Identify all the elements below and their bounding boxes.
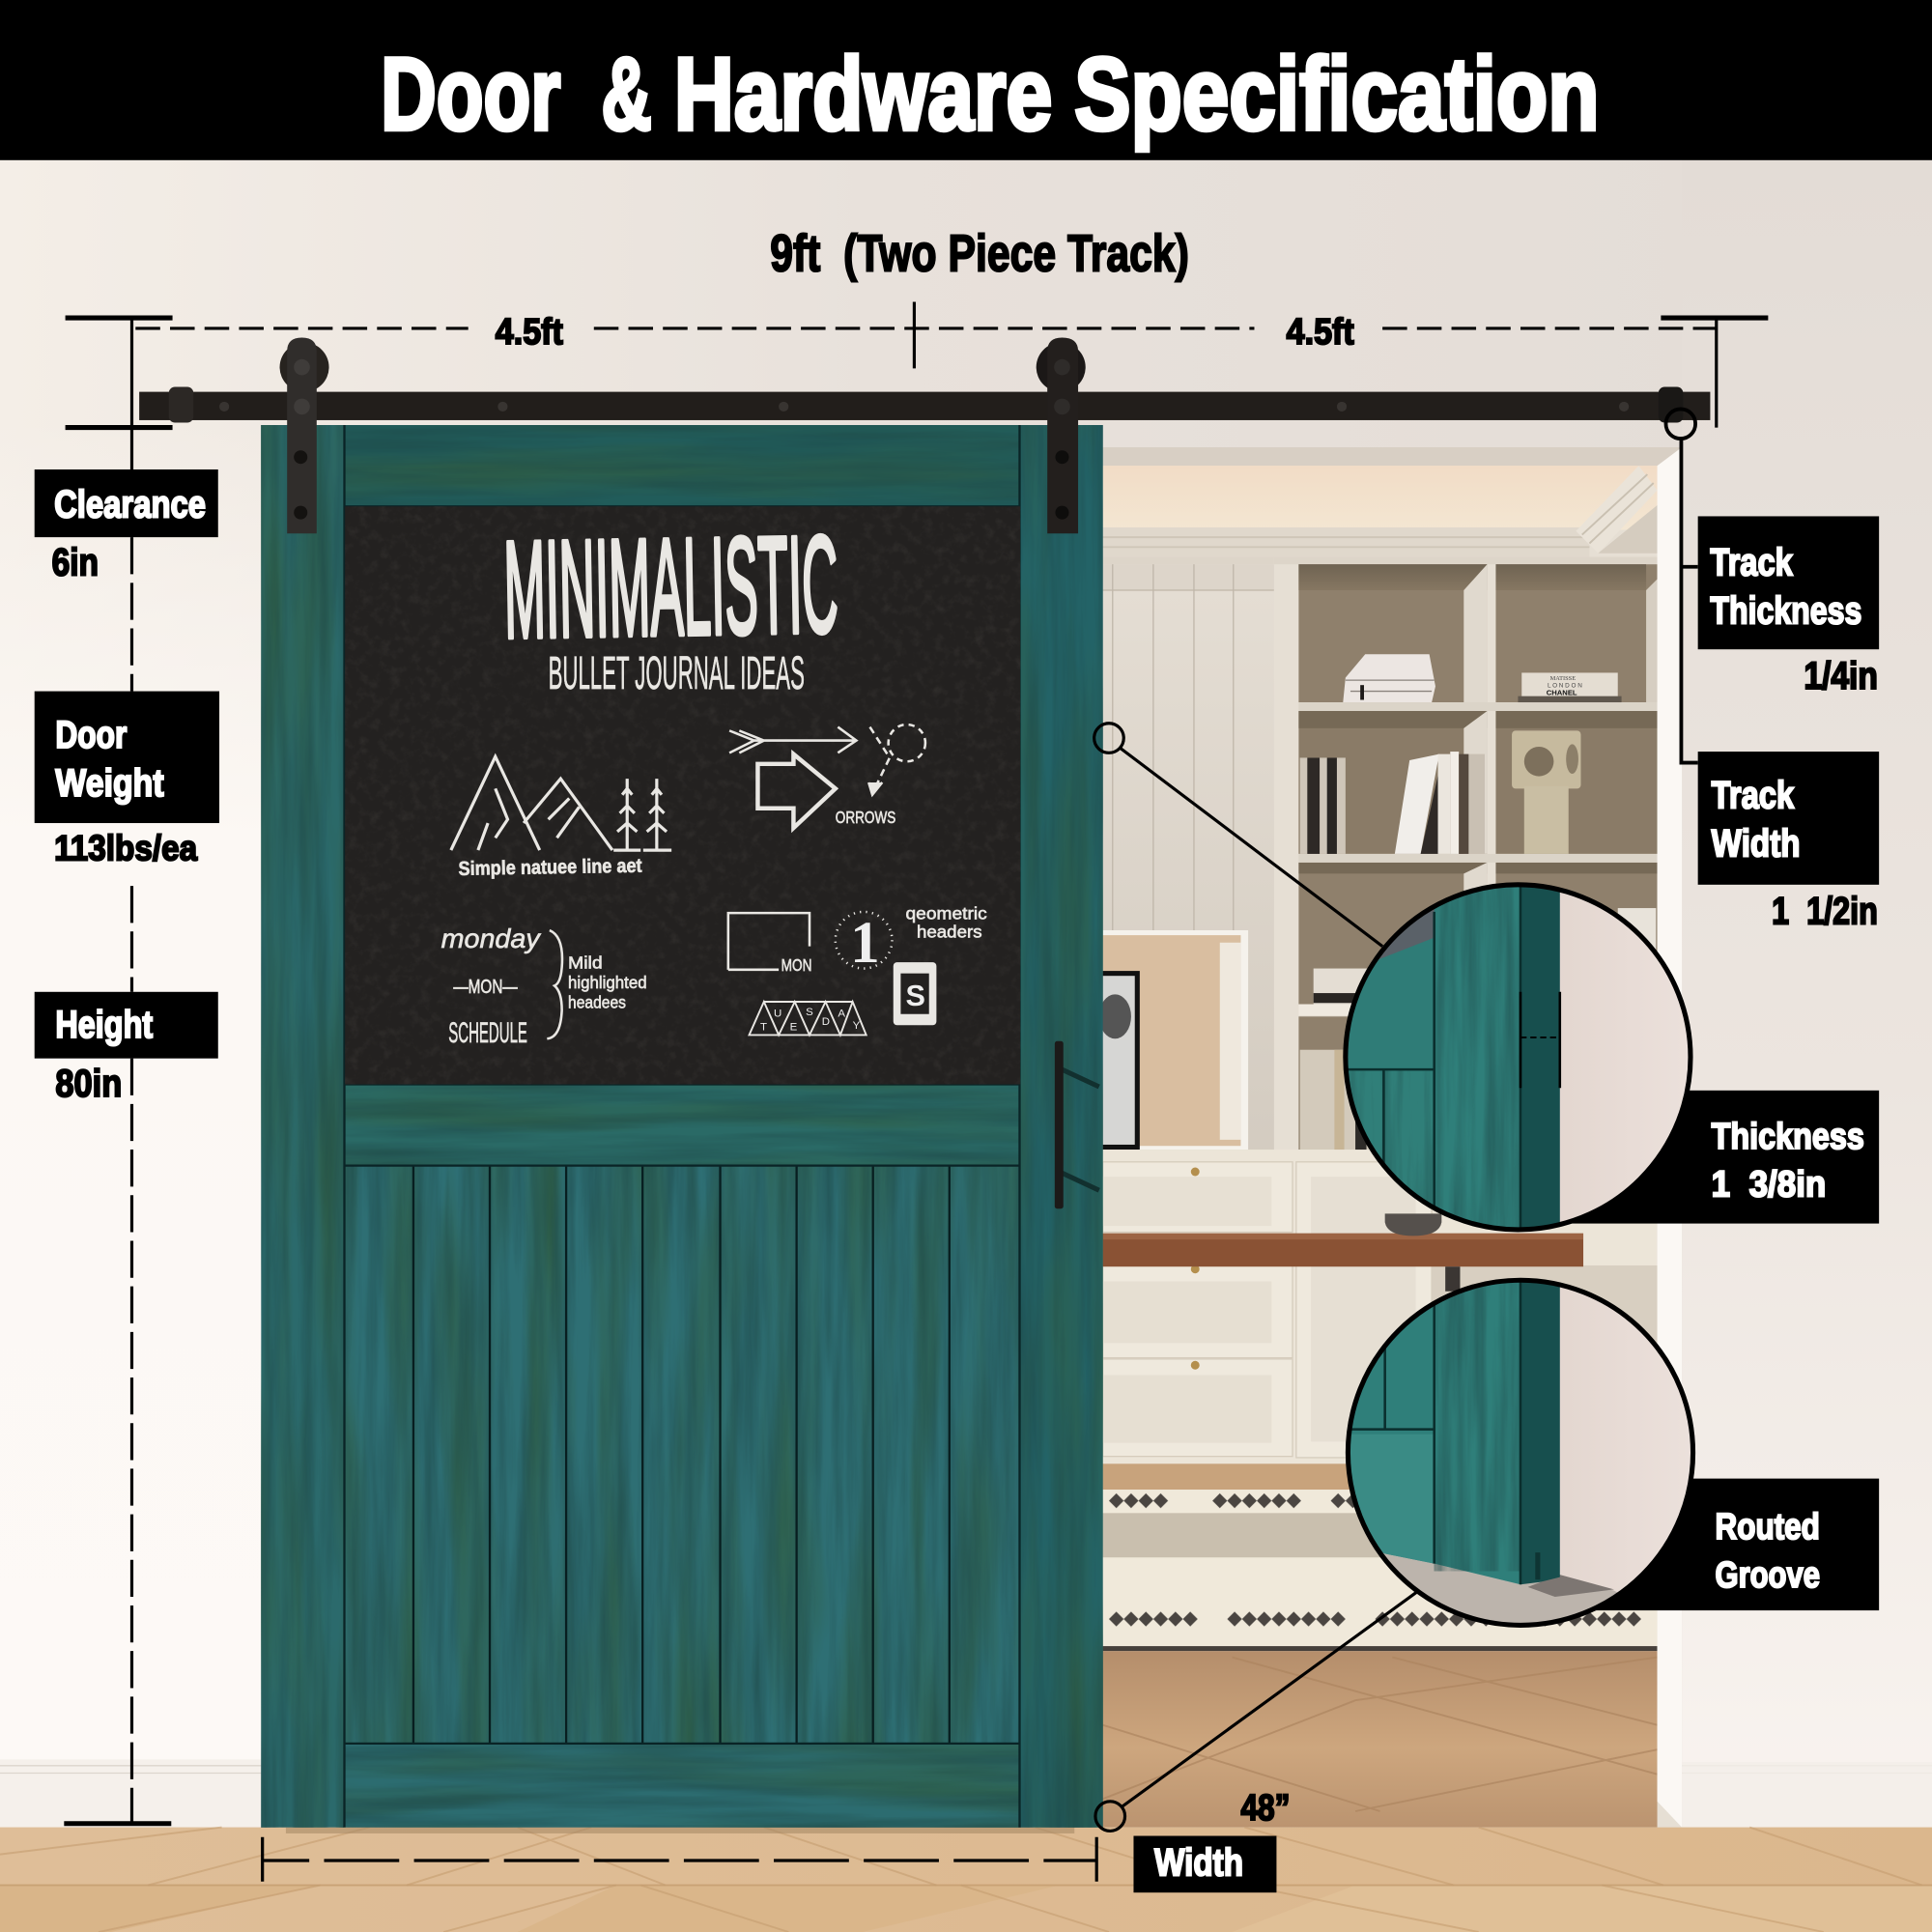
bottom rail: [344, 1744, 1020, 1828]
chalk geometric headers: headers: [917, 923, 982, 942]
routed groove label: Routed: [1716, 1506, 1820, 1548]
door frame jamb: [1658, 447, 1682, 1828]
chalk geometric headers: E: [790, 1021, 798, 1033]
width label: [1133, 1787, 1290, 1892]
track width label: [1698, 752, 1879, 933]
chalk arrows: [729, 724, 925, 828]
routed groove label: Groove: [1716, 1554, 1820, 1596]
track width label: Width: [1712, 822, 1801, 865]
upper callout leader: [1094, 724, 1382, 947]
books and sculpture: [1300, 654, 1656, 1151]
bookshelf: [1274, 557, 1658, 1161]
width label: Width: [1154, 1841, 1243, 1884]
chalk schedule samples: [441, 923, 647, 1049]
left stile: [261, 425, 344, 1828]
chalk geometric headers: A: [838, 1008, 845, 1019]
title: [381, 36, 1600, 152]
track length heading: 9ft (Two Piece Track): [770, 226, 1189, 283]
magnifier: routed groove: [1343, 1275, 1700, 1638]
chalkboard panel: [345, 506, 1020, 1084]
chalk schedule samples: Mild: [568, 953, 603, 973]
door weight label: Door: [55, 714, 127, 756]
books and sculpture: CHANEL: [1547, 688, 1577, 696]
track width label: 1 1/2in: [1772, 891, 1878, 933]
chalk geometric headers: [728, 904, 987, 1035]
title bar: [0, 0, 1932, 160]
room interior through the opening: [1099, 447, 1682, 1828]
thickness label: Thickness: [1712, 1116, 1864, 1157]
chalk mountains and trees: [451, 756, 671, 850]
chalk caption: Simple natuee line aet: [458, 856, 642, 880]
chalk schedule samples: —MON—: [453, 977, 518, 998]
chalk geometric headers: S: [906, 980, 925, 1012]
track thickness label: 1/4in: [1804, 655, 1878, 697]
ceiling soffit and cove glow: [1103, 447, 1682, 466]
right hanger: [1037, 337, 1086, 533]
track dimension line: [66, 301, 1768, 469]
title: Specification: [1074, 36, 1600, 152]
title: Hardware: [674, 36, 1052, 152]
door pull handle: [1055, 1041, 1099, 1208]
chalk geometric headers: T: [760, 1021, 767, 1033]
chalk arrows label: ORROWS: [836, 808, 895, 827]
cabinets: [1103, 1150, 1658, 1463]
lower callout leader: [1095, 1592, 1417, 1831]
magnifier: door thickness: [1343, 881, 1700, 1236]
title: Door: [381, 36, 560, 152]
chalkboard panel: MINIMALISTIC: [502, 508, 839, 668]
barn door: [261, 425, 1103, 1828]
chalk schedule samples: headees: [568, 992, 626, 1011]
books and sculpture: MATISSE: [1550, 675, 1576, 682]
books and sculpture: L O N D O N: [1548, 683, 1582, 690]
clearance label: [35, 469, 218, 584]
door weight label: [35, 692, 219, 867]
left hanger: [280, 337, 329, 533]
track thickness label: [1698, 516, 1879, 697]
height dimension line: [64, 428, 173, 1824]
track thickness label: Thickness: [1710, 589, 1861, 632]
track rail: [139, 387, 1710, 423]
width dimension line: [263, 1837, 1096, 1882]
height label: [35, 992, 218, 1105]
panelled wall: [1103, 557, 1275, 564]
door weight label: Weight: [55, 762, 164, 805]
thickness label: 1 3/8in: [1712, 1164, 1826, 1206]
chalk schedule samples: SCHEDULE: [448, 1017, 527, 1049]
middle rail: [344, 1084, 1020, 1166]
clearance label: 6in: [52, 542, 99, 584]
chalk schedule samples: monday: [441, 923, 542, 953]
rug and room floor: [1103, 1463, 1658, 1828]
right half track label: 4.5ft: [1287, 311, 1354, 353]
right stile: [1020, 425, 1103, 1828]
chalkboard panel: BULLET JOURNAL IDEAS: [549, 647, 805, 699]
door weight label: 113lbs/ea: [54, 828, 197, 867]
left half track label: 4.5ft: [496, 311, 563, 353]
desk and bowl: [1103, 1213, 1583, 1292]
height label: 80in: [55, 1063, 122, 1105]
track width label: Track: [1712, 775, 1795, 817]
clearance label: Clearance: [54, 484, 206, 526]
chalk geometric headers: Y: [853, 1020, 861, 1032]
top rail: [344, 425, 1020, 506]
width label: 48”: [1240, 1787, 1290, 1829]
framed art: [1099, 930, 1248, 1150]
chalk schedule samples: highlighted: [568, 973, 647, 992]
height label: Height: [55, 1004, 153, 1046]
track thickness label: Track: [1710, 542, 1794, 584]
crown moulding: [1103, 466, 1658, 557]
thickness label: [1565, 1091, 1879, 1224]
chalk geometric headers: D: [822, 1016, 830, 1028]
chalk geometric headers: S: [806, 1007, 813, 1018]
track callout leader: [1665, 409, 1698, 763]
lower planks: [344, 1166, 1020, 1744]
chalk geometric headers: MON: [781, 955, 812, 975]
routed groove label: [1565, 1479, 1879, 1610]
chalk geometric headers: U: [774, 1008, 781, 1019]
chalk geometric headers: 1: [850, 910, 880, 976]
title: &: [601, 36, 652, 152]
chalk geometric headers: qeometric: [906, 904, 987, 923]
floor: [0, 1828, 1932, 1932]
